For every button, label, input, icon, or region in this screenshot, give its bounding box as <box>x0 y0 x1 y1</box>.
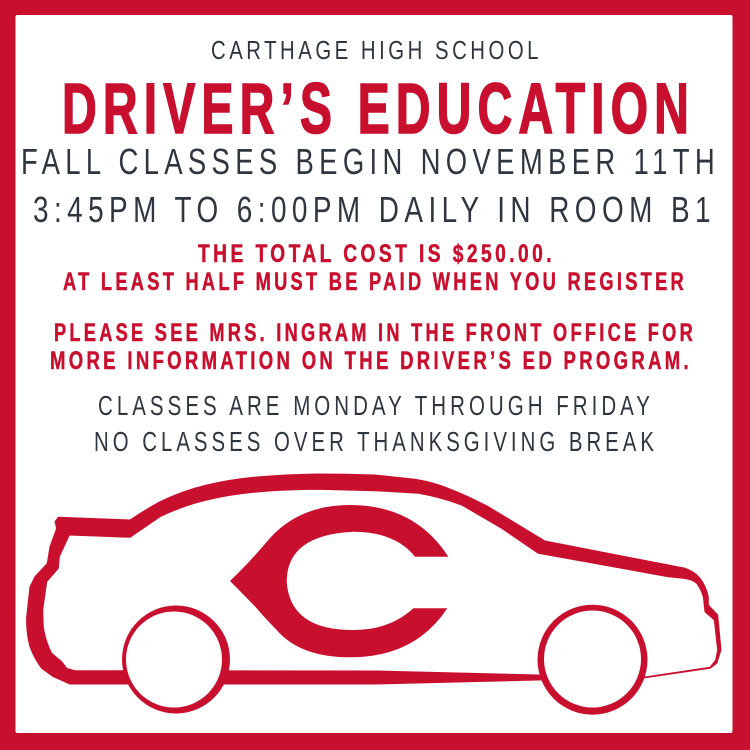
contact notice <box>50 319 696 375</box>
cost notice <box>63 240 687 296</box>
front wheel <box>538 605 648 715</box>
icon: car outline with C logo <box>27 474 721 715</box>
C logo <box>230 505 448 657</box>
school name: CARTHAGE HIGH SCHOOL <box>211 35 542 65</box>
car body outline <box>27 474 721 684</box>
schedule details <box>94 390 658 457</box>
cost notice: THE TOTAL COST IS $250.00. <box>198 240 555 268</box>
rear wheel <box>122 606 230 714</box>
